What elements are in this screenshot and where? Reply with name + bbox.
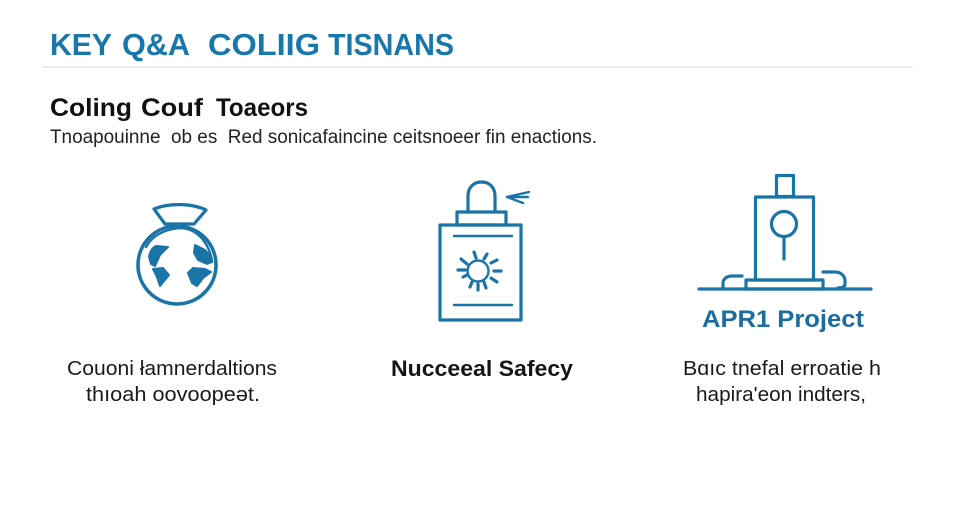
- title: Q&A: [122, 27, 190, 62]
- caption: APR1 project: Bɑıc tnefal erroatie h: [683, 358, 881, 380]
- intro text: Tnoapouinne ob es Red sonicafaincine ceitsnoeer fin enactions.: [50, 127, 597, 148]
- panel: APR1 project: [683, 176, 881, 406]
- caption: APR1 project: hapira'eon indters,: [696, 384, 866, 406]
- title: TISNANS: [328, 27, 454, 62]
- label: APR1 Project: APR1 Project: [702, 306, 864, 333]
- section heading: [50, 94, 308, 122]
- section heading: Coling: [50, 94, 132, 122]
- icon: safety container: [440, 182, 529, 320]
- icon: reactor building: [699, 176, 871, 289]
- icon: globe: [138, 205, 216, 304]
- caption: globe: thıoah oovoopeət.: [86, 384, 260, 406]
- panel: globe: [67, 205, 277, 406]
- title: COLIIG: [208, 27, 320, 62]
- panel: nuclear safety: [391, 182, 574, 381]
- caption: APR1 project: [683, 358, 881, 406]
- title: [50, 27, 454, 62]
- caption: globe: Couoni łamnerdaltions: [67, 358, 277, 380]
- section heading: Toaeors: [216, 94, 308, 122]
- caption: globe: [67, 358, 277, 406]
- title: KEY: [50, 27, 112, 62]
- caption: nuclear safety: Nucceeal Safecy: [391, 356, 574, 381]
- section heading: Couf: [141, 94, 204, 122]
